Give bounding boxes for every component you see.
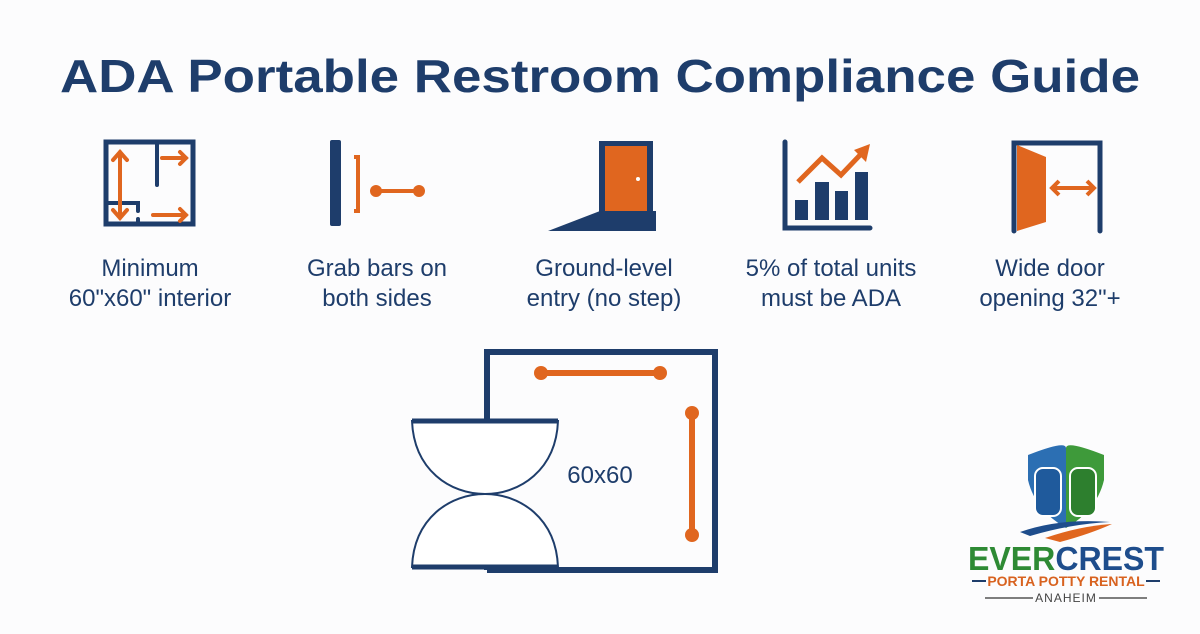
- labels: 5% of total units: [746, 255, 916, 282]
- icon: ground-level entry: [548, 141, 656, 231]
- labels: both sides: [322, 285, 432, 312]
- labels: [69, 255, 1121, 312]
- labels: Grab bars on: [307, 255, 447, 282]
- labels: opening 32"+: [979, 285, 1121, 312]
- icon: grab bars: [330, 140, 425, 226]
- floor plan diagram: [412, 352, 715, 570]
- title: ADA Portable Restroom Compliance Guide: [60, 50, 1140, 102]
- logo: ANAHEIM: [1035, 591, 1097, 605]
- labels: 60"x60" interior: [69, 285, 231, 312]
- labels: Wide door: [995, 255, 1105, 282]
- icon: bar chart: [785, 142, 870, 228]
- labels: Minimum: [101, 255, 199, 282]
- icon: wide door: [1014, 143, 1100, 231]
- labels: Ground-level: [535, 255, 673, 282]
- labels: must be ADA: [761, 285, 901, 312]
- floor plan diagram: 60x60: [567, 462, 633, 489]
- logo: PORTA POTTY RENTAL: [987, 573, 1145, 589]
- logo: EVERCREST: [968, 540, 1164, 577]
- labels: entry (no step): [527, 285, 681, 312]
- logo: [968, 445, 1164, 605]
- icon: floor plan: [106, 142, 193, 224]
